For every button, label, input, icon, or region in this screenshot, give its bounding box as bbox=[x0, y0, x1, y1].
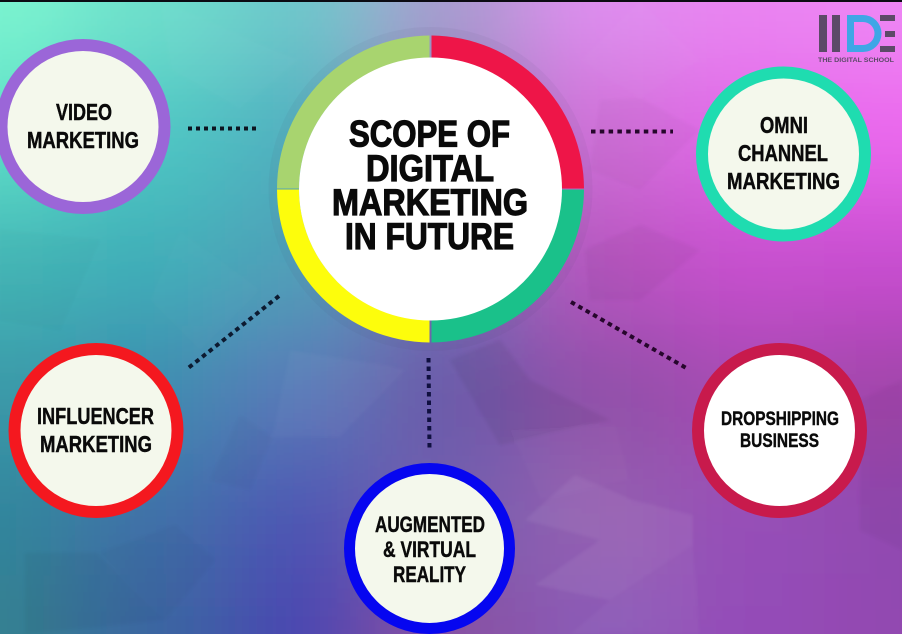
node: omni channel marketing bbox=[702, 72, 865, 236]
node: augmented and virtual reality bbox=[350, 468, 510, 628]
hub centre bbox=[299, 58, 562, 320]
node: augmented and virtual reality: REALITY bbox=[393, 562, 466, 587]
node: augmented and virtual reality: & VIRTUAL bbox=[383, 537, 476, 562]
hub title bbox=[332, 114, 528, 257]
connector: dropshipping business bbox=[571, 302, 688, 369]
node: dropshipping business: BUSINESS bbox=[740, 431, 819, 452]
hub title: SCOPE OF bbox=[349, 114, 510, 154]
node: video marketing: VIDEO bbox=[56, 99, 112, 125]
node: influencer marketing bbox=[14, 349, 178, 512]
top black edge bbox=[0, 0, 902, 2]
node: omni channel marketing: CHANNEL bbox=[738, 140, 828, 166]
hub title: DIGITAL bbox=[366, 148, 494, 189]
node: omni channel marketing: OMNI bbox=[760, 112, 808, 138]
ring segment: teal bottom-right bbox=[432, 190, 584, 342]
logo: IIDE The Digital School bbox=[818, 15, 895, 64]
hub title: MARKETING bbox=[332, 182, 528, 223]
connector: omni channel marketing bbox=[591, 130, 673, 134]
ring segment: red top-right bbox=[432, 36, 584, 188]
central hub: scope of digital marketing in future bbox=[268, 27, 592, 351]
connector: video marketing bbox=[188, 126, 257, 130]
hub title: IN FUTURE bbox=[345, 216, 514, 257]
node: influencer marketing: MARKETING bbox=[40, 431, 152, 457]
ring segment: yellow bottom-left bbox=[277, 190, 430, 342]
logo: IIDE The Digital School: THE DIGITAL SCHOOL bbox=[818, 57, 894, 64]
node: dropshipping business: DROPSHIPPING bbox=[721, 409, 839, 430]
connector: influencer marketing bbox=[187, 296, 279, 369]
connector: augmented and virtual reality bbox=[428, 358, 430, 449]
node: video marketing bbox=[2, 45, 164, 208]
node: video marketing: MARKETING bbox=[27, 127, 139, 153]
ring segment: green top-left bbox=[277, 36, 430, 188]
node: dropshipping business bbox=[698, 349, 861, 512]
node: augmented and virtual reality: AUGMENTED bbox=[375, 512, 485, 537]
node: influencer marketing: INFLUENCER bbox=[37, 403, 154, 429]
node: omni channel marketing: MARKETING bbox=[727, 168, 840, 194]
